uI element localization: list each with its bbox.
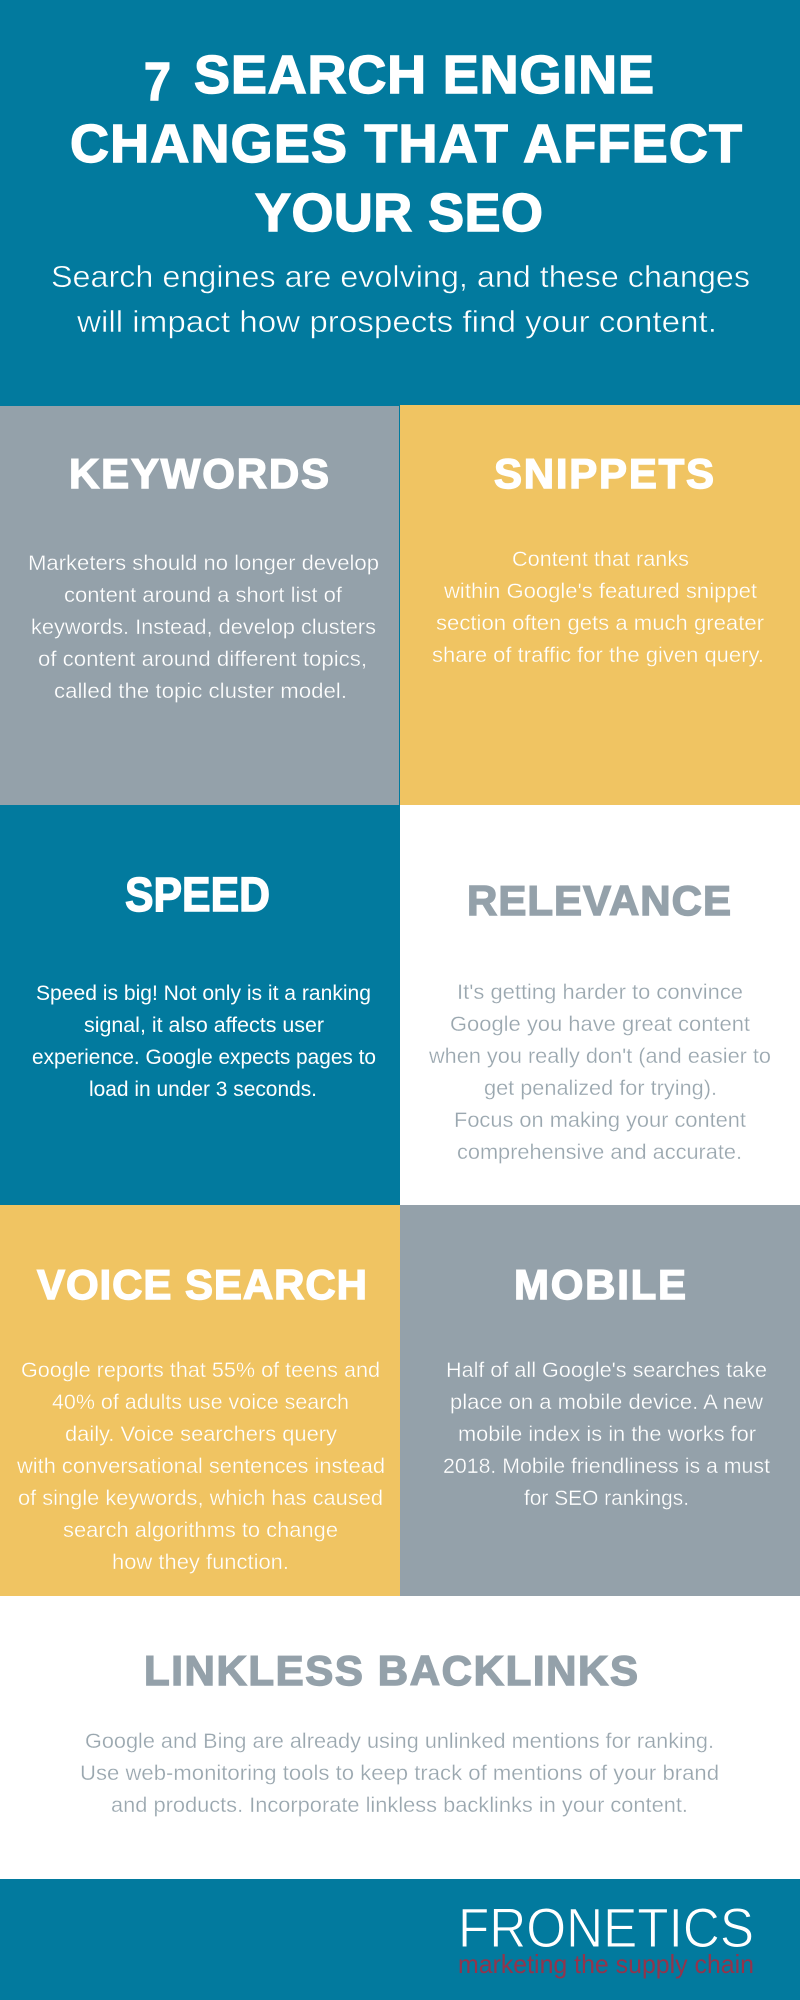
heading: keywords: KEYWORDS — [69, 450, 329, 497]
heading: snippets: SNIPPETS — [494, 450, 714, 497]
text: keywords body: Marketers should no longer develop — [28, 552, 379, 575]
text: mobile body: mobile index is in the works for — [458, 1423, 756, 1446]
heading: relevance: RELEVANCE — [467, 877, 731, 924]
text: mobile body: place on a mobile device. A new — [450, 1391, 764, 1414]
text: voice search body: with conversational sentences instead — [16, 1455, 385, 1478]
text: mobile body: Half of all Google's searches take — [446, 1359, 767, 1382]
text: relevance body — [428, 981, 771, 1164]
text: speed body: Speed is big! Not only is it a ranking — [36, 982, 371, 1005]
text: keywords body: keywords. Instead, develop clusters — [31, 616, 376, 639]
text: speed body: load in under 3 seconds. — [89, 1078, 317, 1101]
panel: mobile — [400, 1205, 800, 1596]
panel: snippets — [399, 405, 800, 805]
text: voice search body: 40% of adults use voice search — [52, 1391, 349, 1414]
text: snippets body: Content that ranks — [512, 548, 689, 571]
text: relevance body: It's getting harder to convince — [457, 981, 743, 1004]
text: speed body — [32, 982, 376, 1101]
panel: speed — [0, 805, 400, 1205]
text: relevance body: Focus on making your content — [454, 1109, 746, 1132]
text: voice search body: how they function. — [112, 1551, 289, 1574]
text: linkless backlinks body: Google and Bing are already using unlinked mentions for ranking. — [85, 1730, 714, 1753]
subtitle: Search engines are evolving, and these changes — [51, 259, 750, 294]
text: snippets body: within Google's featured snippet — [443, 580, 757, 603]
text: relevance body: when you really don't (and easier to — [428, 1045, 771, 1068]
text: keywords body — [28, 552, 379, 703]
title: CHANGES THAT AFFECT — [70, 114, 742, 174]
text: relevance body: get penalized for trying). — [484, 1077, 717, 1100]
heading: voice search: VOICE SEARCH — [37, 1261, 367, 1308]
title — [70, 45, 742, 243]
text: mobile body: 2018. Mobile friendliness is a must — [443, 1455, 770, 1478]
panel: relevance — [400, 805, 800, 1205]
text: speed body: experience. Google expects pages to — [32, 1046, 376, 1069]
title: 7 — [144, 52, 171, 112]
text: mobile body: for SEO rankings. — [524, 1487, 689, 1510]
text: voice search body: daily. Voice searchers query — [65, 1423, 338, 1446]
text: voice search body: of single keywords, which has caused — [18, 1487, 383, 1510]
text: keywords body: of content around different topics, — [38, 648, 367, 671]
heading: linkless backlinks: LINKLESS BACKLINKS — [144, 1647, 638, 1694]
subtitle — [51, 259, 750, 339]
text: linkless backlinks body: Use web-monitoring tools to keep track of mentions of your brand — [80, 1762, 719, 1785]
title: YOUR SEO — [255, 183, 543, 243]
heading: mobile: MOBILE — [514, 1261, 686, 1308]
text: voice search body: search algorithms to change — [63, 1519, 338, 1542]
panel: keywords — [0, 406, 399, 805]
panel: linkless backlinks — [0, 1596, 800, 1879]
header panel — [0, 0, 800, 406]
tagline: marketing the supply chain — [458, 1949, 754, 1979]
heading: speed: SPEED — [125, 869, 270, 922]
text: keywords body: called the topic cluster model. — [54, 680, 347, 703]
text: snippets body: share of traffic for the given query. — [432, 644, 764, 667]
footer panel — [0, 1879, 800, 2000]
text: voice search body: Google reports that 55% of teens and — [21, 1359, 380, 1382]
text: keywords body: content around a short list of — [64, 584, 342, 607]
text: snippets body — [432, 548, 764, 667]
text: voice search body — [16, 1359, 385, 1574]
text: mobile body — [443, 1359, 770, 1510]
text: speed body: signal, it also affects user — [84, 1014, 324, 1037]
title: SEARCH ENGINE — [194, 45, 654, 105]
text: snippets body: section often gets a much greater — [436, 612, 764, 635]
logo: Fronetics: FRONETICS — [458, 1896, 754, 1959]
text: linkless backlinks body: and products. Incorporate linkless backlinks in your content. — [111, 1794, 688, 1817]
text: relevance body: comprehensive and accurate. — [457, 1141, 742, 1164]
text: relevance body: Google you have great content — [450, 1013, 750, 1036]
panel: voice search — [0, 1205, 400, 1596]
text: linkless backlinks body — [80, 1730, 719, 1817]
subtitle: will impact how prospects find your content. — [76, 304, 717, 339]
